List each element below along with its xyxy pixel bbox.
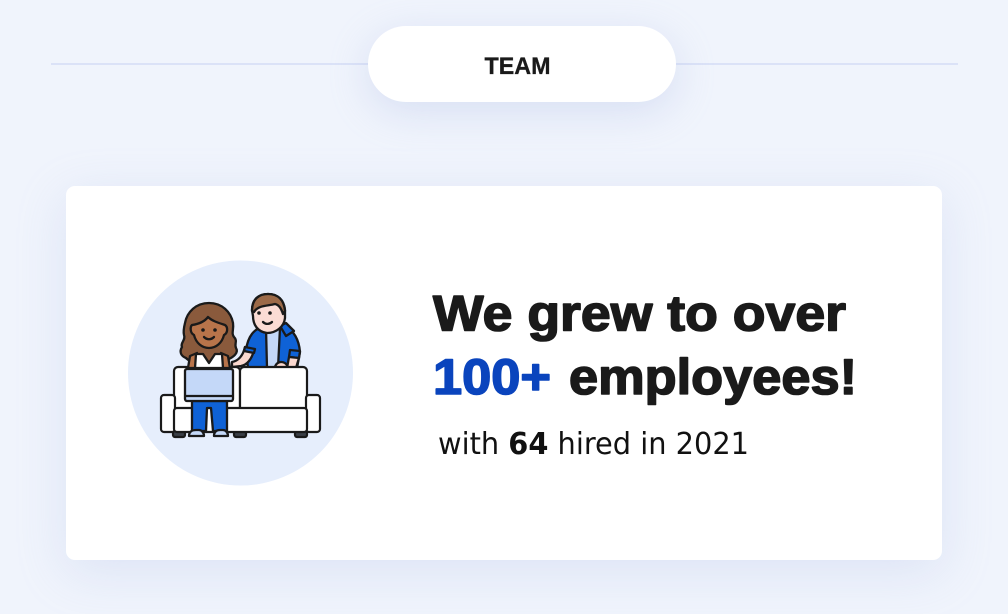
shoes	[189, 430, 204, 436]
panel: team card	[66, 186, 942, 560]
pill label: TEAM	[484, 53, 550, 80]
laptop	[185, 369, 233, 401]
header rule	[51, 63, 958, 65]
sofa seat	[174, 408, 307, 432]
subheading: with 64 hired in 2021	[438, 427, 749, 462]
legs	[192, 401, 227, 431]
woman	[181, 303, 237, 436]
icon background circle	[128, 260, 353, 486]
sofa back	[174, 367, 240, 415]
section pill: TEAM	[368, 26, 676, 102]
torso	[246, 326, 300, 368]
sofa arms	[161, 395, 175, 432]
feet	[173, 431, 185, 437]
headline line 2: 100+: 100+	[433, 349, 551, 405]
arms and top	[188, 353, 230, 368]
head	[252, 294, 285, 333]
face	[191, 317, 227, 348]
hair	[181, 303, 237, 366]
headline line 2: employees: employees!	[569, 349, 857, 405]
sofa	[161, 367, 320, 437]
headline line 1: We grew to over	[433, 286, 846, 342]
man	[232, 294, 300, 368]
